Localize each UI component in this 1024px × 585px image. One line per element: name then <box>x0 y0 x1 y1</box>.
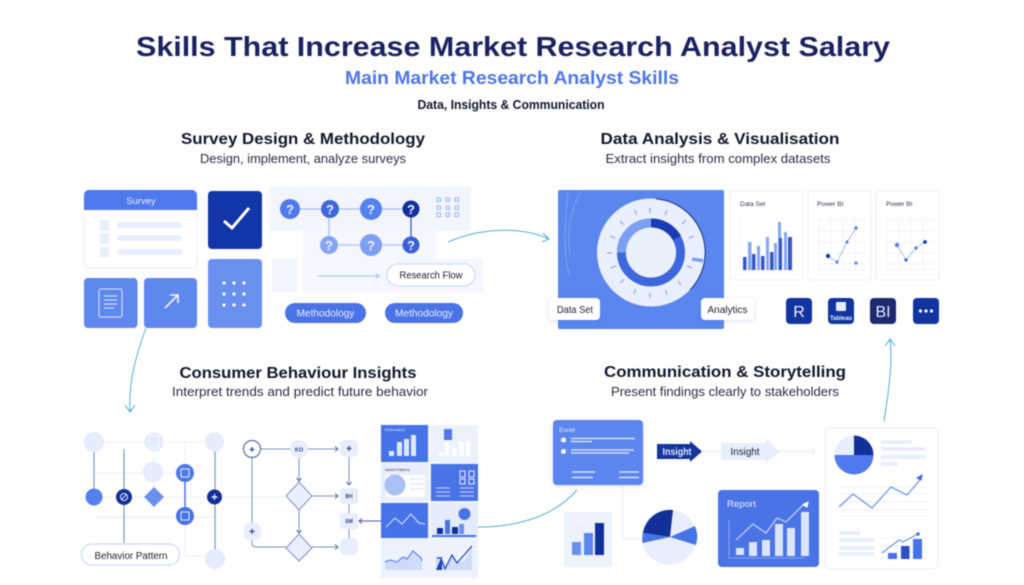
flowchart: + <box>249 527 255 538</box>
heading: data analysis <box>600 131 840 166</box>
survey form card: Survey <box>126 196 156 207</box>
title: Skills That Increase Market Research Analyst Salary <box>136 31 891 62</box>
data set label: Data Set <box>557 305 593 316</box>
arrow: survey to data analysis <box>448 230 549 242</box>
icon: dots tile <box>208 259 262 328</box>
arrow: report to tools <box>884 339 895 421</box>
panel: data analysis <box>549 190 939 329</box>
flowchart: SM <box>345 519 353 525</box>
mosaic tile 2 <box>431 425 478 462</box>
panel: communication <box>553 420 938 569</box>
insight arrow dark: Insight <box>662 447 692 458</box>
research flow diagram: ? <box>407 202 415 217</box>
heading: communication: Present findings clearly to stakeholders <box>611 385 839 399</box>
research flow diagram: ? <box>407 238 415 253</box>
methodology pill 2 <box>385 303 463 323</box>
heading: data analysis: Extract insights from complex datasets <box>606 152 830 166</box>
mosaic tile 3 <box>381 464 428 501</box>
behaviour network <box>84 432 285 569</box>
mosaic tile 8 <box>431 540 478 577</box>
arrow: survey to behaviour <box>125 328 146 412</box>
insight arrow light: Insight <box>730 447 760 458</box>
mosaic tile 7 <box>381 540 428 577</box>
icon: BI: BI <box>875 304 891 321</box>
report pie <box>834 436 874 474</box>
heading: consumer behaviour: Consumer Behaviour Insights <box>180 365 417 382</box>
heading: consumer behaviour <box>172 365 428 399</box>
pie chart <box>642 510 697 564</box>
panel: survey design <box>84 187 483 328</box>
icon: checkmark tile <box>208 191 262 249</box>
arrow: mosaic to excel <box>478 490 577 527</box>
mosaic tile 1: Performance <box>385 428 405 432</box>
research flow diagram: ? <box>326 202 334 217</box>
heading: survey design <box>181 131 425 166</box>
excel card: Excel <box>559 427 575 434</box>
heading: consumer behaviour: Interpret trends and predict future behavior <box>172 385 428 399</box>
research flow diagram: ? <box>367 202 375 217</box>
power bi chart 2: Power BI <box>886 201 913 208</box>
methodology pill 2: Methodology <box>395 308 453 320</box>
insight arrow light <box>702 439 815 463</box>
power bi chart 1: Power BI <box>817 201 844 208</box>
heading: survey design: Survey Design & Methodology <box>181 131 425 148</box>
analytics label: Analytics <box>708 305 748 316</box>
dashboard mosaic <box>381 425 478 578</box>
radial dashboard <box>558 190 724 329</box>
small bar card: Report <box>571 519 587 525</box>
icon: BI <box>870 298 896 324</box>
methodology pill 1: Methodology <box>296 308 354 320</box>
flowchart: BH <box>345 494 353 500</box>
mosaic tile 4 <box>431 464 478 501</box>
report chart card <box>718 490 819 567</box>
flowchart: + <box>346 444 352 455</box>
research flow pill: Research Flow <box>400 270 463 282</box>
power bi chart 1 <box>808 191 871 280</box>
icon: document tile <box>84 278 138 328</box>
research flow pill <box>387 264 475 286</box>
panel: consumer behaviour <box>82 425 478 578</box>
bar chart card <box>730 191 803 280</box>
heading: communication <box>604 364 846 399</box>
analytics label <box>701 298 754 320</box>
excel card <box>553 420 643 485</box>
report chart card: Report <box>727 499 757 509</box>
icon: R <box>786 298 812 324</box>
flowchart: KO <box>295 448 304 454</box>
subtitle: Main Market Research Analyst Skills <box>345 67 679 88</box>
icon: Tableau: Tableau <box>830 316 852 322</box>
research flow diagram: ? <box>367 238 375 253</box>
heading: data analysis: Data Analysis & Visualisation <box>600 131 840 148</box>
flowchart <box>244 440 381 561</box>
tagline: Data, Insights & Communication <box>418 98 604 112</box>
mosaic tile 1 <box>381 425 428 462</box>
icon: Tableau <box>828 298 854 324</box>
research flow diagram <box>270 187 483 292</box>
icon: arrow tile <box>144 278 197 328</box>
summary report card <box>825 428 938 569</box>
heading: communication: Communication & Storytelling <box>604 364 846 381</box>
icon: R: R <box>793 304 805 321</box>
research flow diagram: ? <box>325 238 333 253</box>
mosaic tile 3: Market Patterns <box>385 468 410 472</box>
flowchart: + <box>249 445 255 456</box>
survey form card <box>84 190 197 268</box>
small bar card <box>564 512 612 567</box>
icon: more <box>913 298 939 324</box>
data set label <box>549 298 600 320</box>
mosaic tile 6 <box>431 503 478 538</box>
mosaic tile 5 <box>381 503 428 538</box>
behavior pattern pill: Behavior Pattern <box>94 551 168 562</box>
research flow diagram: ? <box>286 202 294 217</box>
insight arrow dark <box>657 441 702 462</box>
methodology pill 1 <box>285 303 366 323</box>
heading: survey design: Design, implement, analyze surveys <box>200 152 406 166</box>
bar chart card: Data Set <box>740 201 765 208</box>
power bi chart 2 <box>876 191 939 280</box>
behavior pattern pill <box>82 544 180 565</box>
